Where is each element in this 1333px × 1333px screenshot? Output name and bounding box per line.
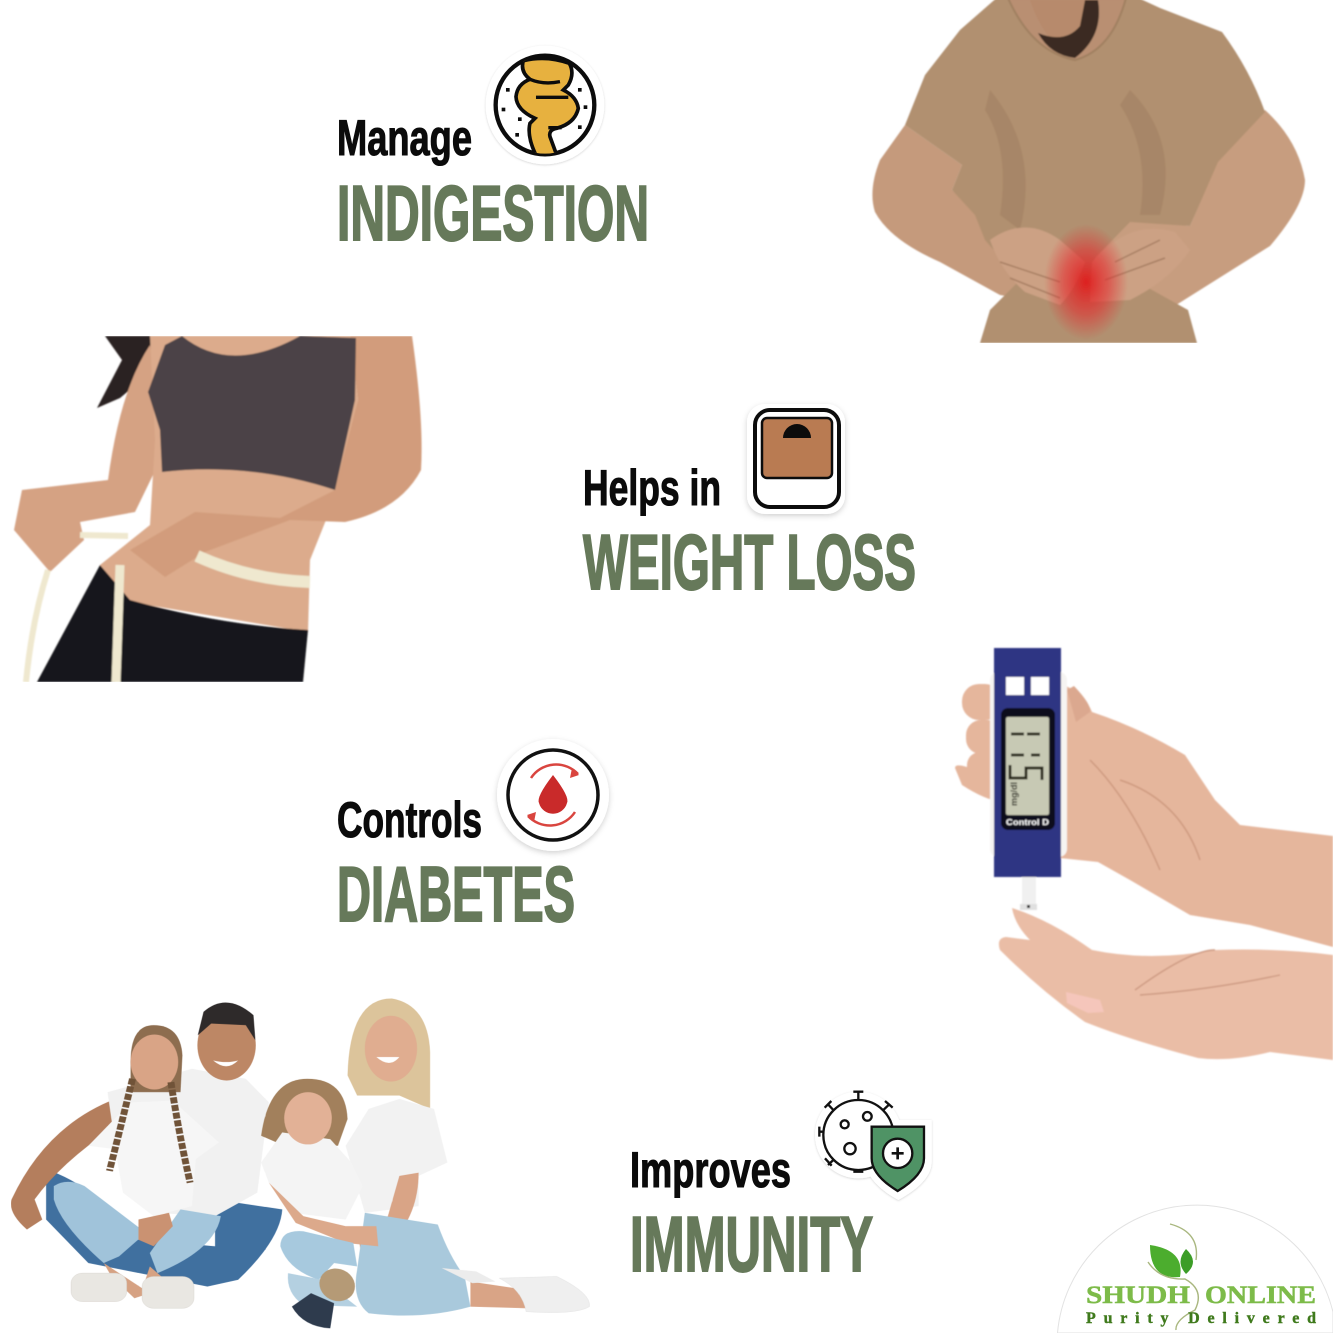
logo wordmark: SHUDH: [1086, 1282, 1191, 1309]
heading: Controls Diabetes: [337, 792, 575, 938]
man t-shirt: [905, 0, 1265, 343]
glucose meter: mg/dl: [1009, 782, 1019, 806]
pain glow: [1046, 228, 1126, 336]
man head and neck: [1008, 0, 1126, 60]
heading: Helps in Weight Loss: Helps in: [583, 460, 721, 516]
logo leaves: [1148, 1224, 1198, 1330]
logo: Shudh Online: ONLINE: [1205, 1282, 1316, 1309]
woman sports bra: [148, 336, 356, 490]
logo tagline: Purity Delivered: [1086, 1310, 1316, 1327]
heading: Controls Diabetes: Controls: [337, 792, 482, 848]
photo: family sitting together: [11, 998, 590, 1328]
glucose meter: [990, 648, 1067, 910]
measuring tape: [26, 535, 310, 682]
photo: woman measuring waist: [14, 336, 422, 682]
woman skin: [14, 336, 422, 632]
logo: Shudh Online: [1058, 1205, 1333, 1333]
heading: Manage Indigestion: [337, 110, 649, 257]
heading: Improves Immunity: [630, 1142, 873, 1288]
heading: Improves Immunity: Improves: [630, 1142, 791, 1198]
photo: glucose meter in hands: [955, 648, 1333, 1060]
photo: man holding stomach: [872, 0, 1305, 343]
heading: Manage Indigestion: INDIGESTION: [337, 169, 649, 257]
icon: weighing scale: [747, 404, 845, 514]
woman black pants: [37, 565, 308, 682]
icon: blood drop: [497, 739, 609, 851]
older girl: [54, 1025, 221, 1308]
man dad: [11, 1003, 282, 1286]
mother: [346, 998, 590, 1316]
heading: Helps in Weight Loss: WEIGHT LOSS: [583, 518, 916, 606]
thumb of upper hand: [1067, 686, 1090, 722]
heading: Improves Immunity: IMMUNITY: [630, 1200, 873, 1288]
icon: virus and shield: [815, 1092, 932, 1200]
younger girl: [261, 1079, 378, 1328]
heading: Controls Diabetes: DIABETES: [337, 850, 575, 938]
heading: Manage Indigestion: Manage: [337, 110, 472, 166]
woman hair: [96, 336, 152, 409]
glucose meter: Control D: [1006, 817, 1049, 827]
upper hand: [955, 684, 1333, 947]
lower hand: [999, 908, 1333, 1060]
heading: Helps in Weight Loss: [583, 460, 916, 606]
icon: intestine: [486, 46, 604, 164]
man hands: [990, 227, 1165, 305]
man arms: [872, 110, 1305, 312]
